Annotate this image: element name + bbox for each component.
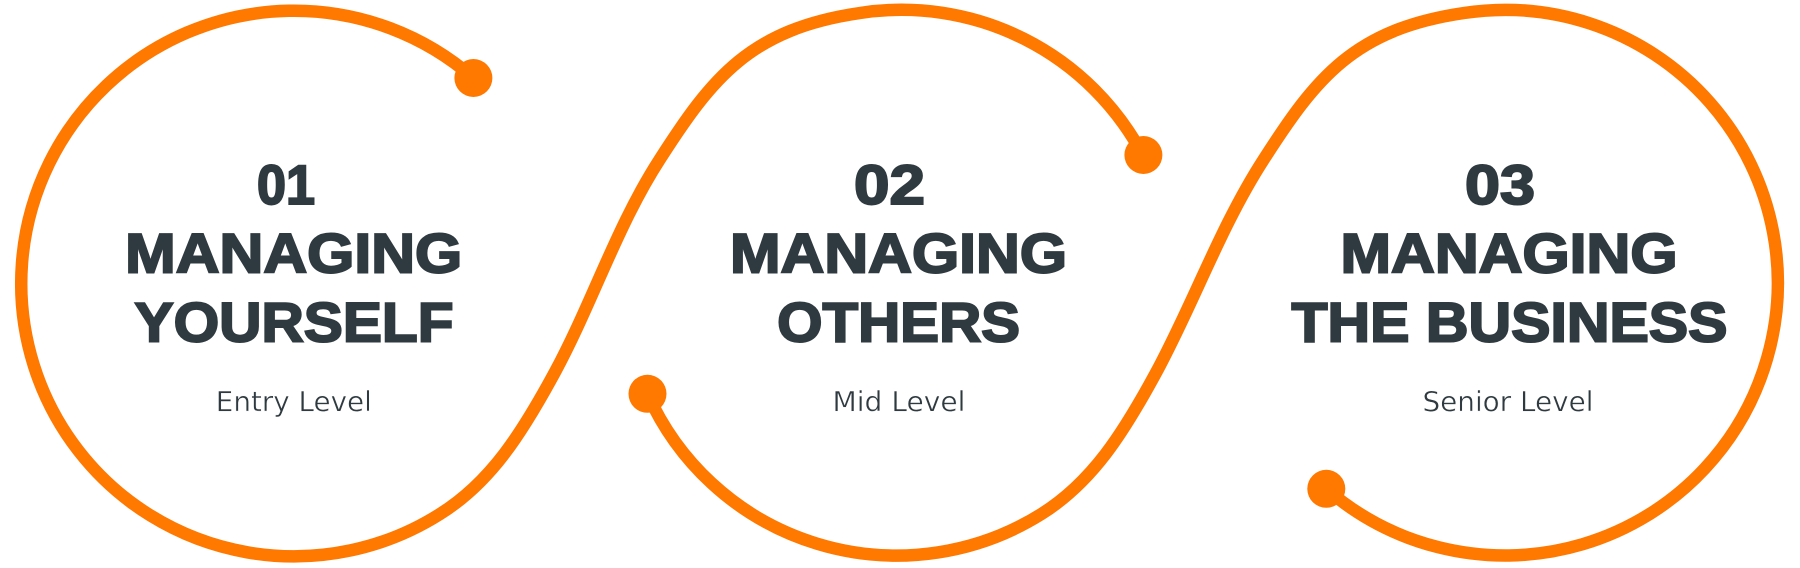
heading line: managing: MANAGING: [125, 223, 462, 285]
heading line: the business: THE BUSINESS: [1292, 292, 1728, 354]
subtitle: entry level: Entry Level: [216, 385, 372, 418]
heading line: managing: MANAGING: [730, 223, 1067, 285]
connector line: second circle bottom through S-curve to third circle: [628, 10, 1778, 556]
number 01: 01: [257, 154, 315, 216]
panel: level 01 managing yourself: [125, 154, 462, 418]
subtitle: senior level: Senior Level: [1422, 385, 1594, 418]
connector line: first circle through S-curve to second circle top: [21, 10, 1162, 556]
heading line: managing: MANAGING: [1340, 223, 1678, 285]
heading line: yourself: YOURSELF: [134, 292, 454, 354]
subtitle: mid level: Mid Level: [832, 385, 966, 418]
heading line: others: OTHERS: [777, 292, 1020, 354]
number 02: 02: [854, 154, 925, 216]
number 03: 03: [1465, 154, 1535, 216]
panel: level 02 managing others: [730, 154, 1067, 418]
panel: level 03 managing the business: [1292, 154, 1728, 418]
